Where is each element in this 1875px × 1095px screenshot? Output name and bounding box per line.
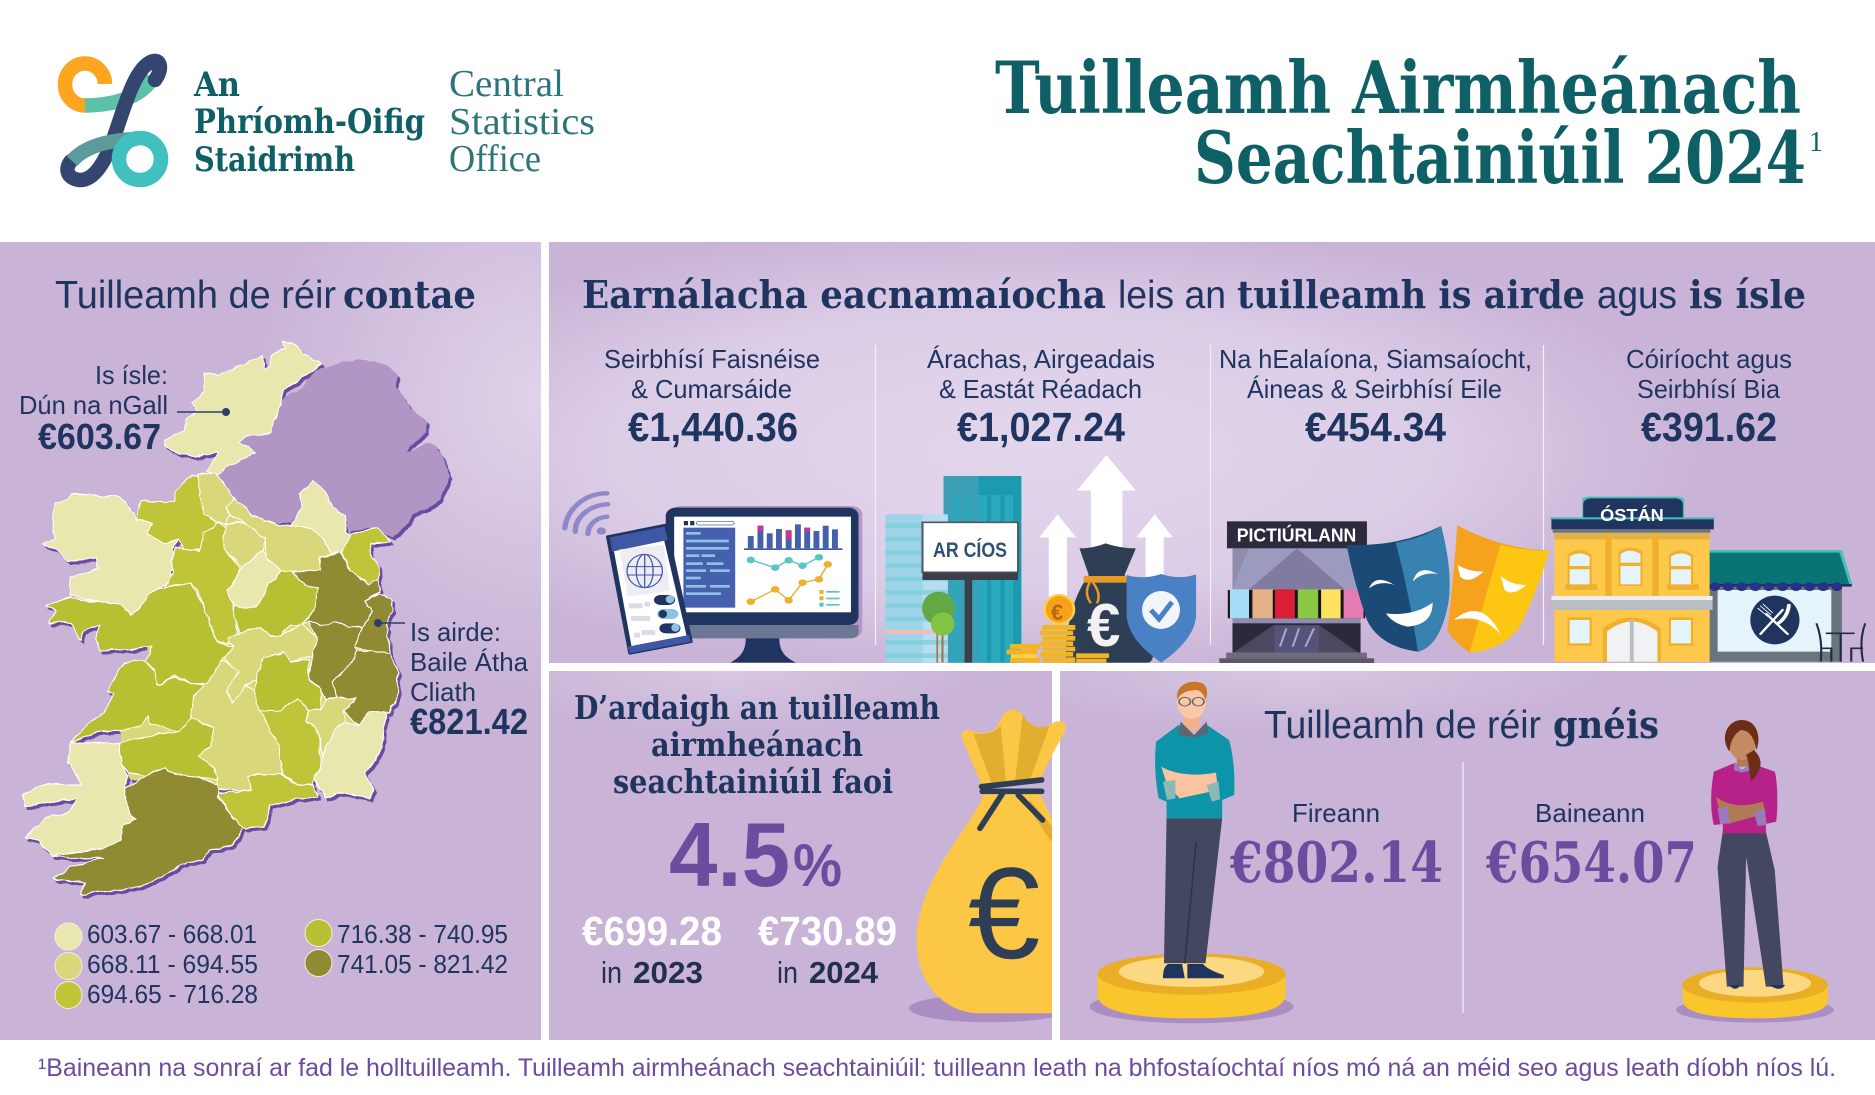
callout: lowest county: €603.67 bbox=[38, 416, 161, 457]
growth statement: seachtainiúil faoi bbox=[613, 762, 893, 801]
logo text: Irish: Phríomh-Oifig bbox=[194, 102, 425, 142]
male figure: Fireann bbox=[1292, 798, 1380, 828]
logo bbox=[65, 61, 595, 180]
logo text: English: Statistics bbox=[449, 101, 595, 143]
sector 3 text bbox=[1219, 344, 1532, 450]
logo text: English: Central bbox=[449, 63, 564, 105]
sector 2 text: Árachas, Airgeadais bbox=[927, 344, 1155, 374]
white gutter between lower panels bbox=[1052, 671, 1060, 1040]
illustration: woman on coin bbox=[1676, 720, 1834, 1023]
heading: sex bbox=[1264, 702, 1659, 747]
illustration: man on coin bbox=[1090, 682, 1293, 1023]
logo mark bbox=[65, 61, 161, 180]
title bbox=[995, 45, 1823, 200]
sector 2 text: & Eastát Réadach bbox=[939, 374, 1142, 404]
2023 figure: €699.28 bbox=[582, 908, 722, 954]
2023 figure: in bbox=[601, 955, 622, 990]
female figure: Baineann bbox=[1535, 798, 1645, 828]
heading: sectors: agus bbox=[1597, 274, 1677, 317]
2024 figure: 2024 bbox=[809, 955, 879, 990]
logo text: Irish bbox=[193, 65, 425, 180]
hotel sign text: ÓSTÁN bbox=[1600, 504, 1664, 525]
sector 4 text bbox=[1626, 344, 1792, 450]
heading: sectors: Earnálacha eacnamaíocha bbox=[582, 272, 1106, 317]
callout: highest county: Cliath bbox=[410, 677, 476, 707]
icon: cinema and theatre masks bbox=[1219, 521, 1549, 663]
female figure bbox=[1485, 798, 1697, 896]
heading: sex: Tuilleamh de réir bbox=[1264, 704, 1541, 747]
icon: hotel and restaurant bbox=[1551, 497, 1865, 662]
map legend: 716.38 - 740.95 bbox=[337, 919, 508, 949]
bag euro symbol: € bbox=[968, 840, 1040, 986]
heading: county: contae bbox=[343, 272, 476, 317]
sector 3 text: €454.34 bbox=[1305, 404, 1446, 450]
footnote: ¹Baineann na sonraí ar fad le holltuilleamh. Tuilleamh airmheánach seachtainiúil: tuilleann leath na bhfostaíochtaí níos mó ná an méid seo agus leath díobh níos lú. bbox=[38, 1054, 1836, 1082]
sector 2 text: €1,027.24 bbox=[957, 404, 1125, 450]
male figure: €802.14 bbox=[1229, 830, 1443, 896]
sector 3 text: Áineas & Seirbhísí Eile bbox=[1247, 374, 1502, 404]
map legend: 694.65 - 716.28 bbox=[87, 979, 258, 1009]
heading: county bbox=[55, 272, 476, 317]
sector 1 text bbox=[604, 344, 820, 450]
sector 1 text: Seirbhísí Faisnéise bbox=[604, 344, 820, 374]
growth figure: % bbox=[793, 832, 842, 899]
growth figure: 4.5 bbox=[669, 805, 790, 906]
2024 figure: in bbox=[777, 955, 798, 990]
shield check bbox=[1142, 591, 1180, 629]
icon: property, arrows and money bbox=[885, 455, 1196, 663]
sector 4 text: Cóiríocht agus bbox=[1626, 344, 1792, 374]
panel: annual growth bbox=[549, 671, 1052, 1040]
sector 3 text: Na hEalaíona, Siamsaíocht, bbox=[1219, 344, 1532, 374]
map of Ireland by county bbox=[23, 341, 449, 894]
male figure bbox=[1229, 798, 1443, 896]
sector 1 text: €1,440.36 bbox=[628, 404, 798, 450]
growth statement: airmheánach bbox=[651, 725, 863, 764]
2024 figure bbox=[758, 908, 897, 990]
panel: economic sectors bbox=[549, 242, 1875, 663]
callout: lowest county: Is ísle: bbox=[95, 360, 168, 390]
map legend: 668.11 - 694.55 bbox=[87, 949, 258, 979]
logo text: Irish: An bbox=[193, 65, 240, 105]
callout: highest county: Baile Átha bbox=[410, 647, 529, 677]
heading: sectors bbox=[582, 272, 1806, 317]
heading: sex: gnéis bbox=[1553, 702, 1659, 747]
2023 figure: 2023 bbox=[633, 955, 703, 990]
callout: highest county bbox=[374, 617, 529, 742]
map legend: 603.67 - 668.01 bbox=[87, 919, 257, 949]
2023 figure bbox=[582, 908, 722, 990]
map legend bbox=[55, 919, 508, 1009]
heading: sectors: tuilleamh is airde bbox=[1237, 272, 1585, 317]
callout: highest county: Is airde: bbox=[410, 617, 501, 647]
sector 2 text bbox=[927, 344, 1155, 450]
logo text: English bbox=[449, 63, 595, 180]
heading: sectors: is ísle bbox=[1689, 272, 1806, 317]
callout: lowest county: Dún na nGall bbox=[19, 390, 168, 420]
logo text: English: Office bbox=[449, 138, 541, 180]
sector 1 text: & Cumarsáide bbox=[631, 374, 792, 404]
map legend: 741.05 - 821.42 bbox=[337, 949, 508, 979]
sector 4 text: Seirbhísí Bia bbox=[1637, 374, 1781, 404]
callout: lowest county bbox=[19, 360, 230, 457]
illustration: money bag bbox=[909, 710, 1071, 1022]
bag euro: € bbox=[1087, 592, 1120, 659]
logo text: Irish: Staidrimh bbox=[194, 140, 355, 180]
growth statement bbox=[574, 688, 940, 801]
female figure: €654.07 bbox=[1485, 830, 1697, 896]
panel: earnings by sex bbox=[1060, 671, 1875, 1040]
panel: county earnings bbox=[0, 242, 541, 1040]
heading: sectors: leis an bbox=[1118, 274, 1226, 317]
callout: highest county: €821.42 bbox=[410, 701, 528, 742]
icon: phone and monitor bbox=[565, 493, 862, 663]
billboard label: AR CÍOS bbox=[933, 539, 1007, 562]
2024 figure: €730.89 bbox=[758, 908, 897, 954]
coin euro: € bbox=[1051, 600, 1063, 625]
title: 1 bbox=[1809, 127, 1823, 158]
sector 4 text: €391.62 bbox=[1641, 404, 1777, 450]
heading: county: Tuilleamh de réir bbox=[55, 274, 336, 317]
cinema sign text: PICTIÚRLANN bbox=[1237, 524, 1356, 546]
growth statement: D’ardaigh an tuilleamh bbox=[574, 688, 940, 727]
